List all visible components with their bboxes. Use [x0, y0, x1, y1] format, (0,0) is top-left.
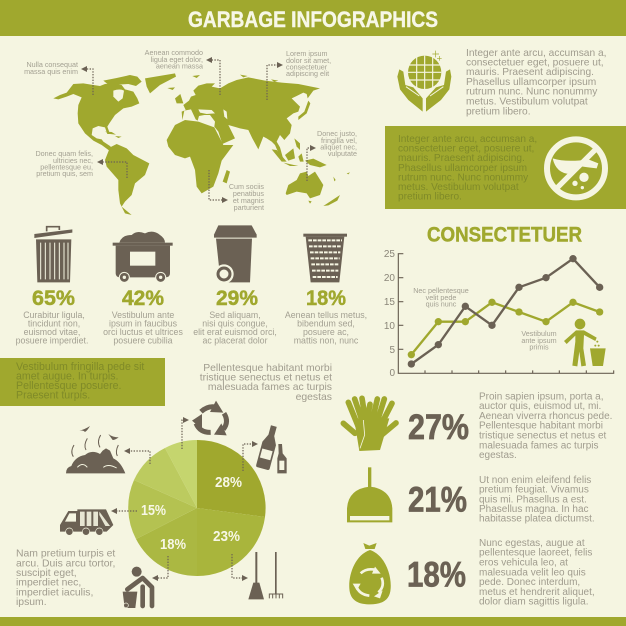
text: stat captions: ac placerat dolor — [202, 336, 268, 346]
line chart: 25 — [384, 249, 395, 260]
icon: dustpan — [347, 467, 392, 522]
text: gloves: auctor quis, euismod ut, mi. — [479, 401, 601, 412]
panel: green callout: Integer ante arcu, accumsan a, — [398, 134, 537, 145]
text: stat captions: ipsum in faucibus — [109, 318, 178, 328]
panel: left green box: amet augue. In turpis. — [16, 370, 118, 382]
stat: 29%: 29% — [216, 286, 258, 310]
text: stat captions: tincidunt non, — [28, 318, 80, 328]
map callouts: Donec quam felis, — [35, 149, 93, 158]
line chart: 0 — [389, 368, 395, 379]
icon: globe in hands — [397, 51, 451, 112]
text: gloves: Proin sapien ipsum, porta a, — [479, 391, 604, 402]
stat: 18%: 18% — [306, 286, 346, 310]
map callouts: Nulla consequat — [26, 60, 78, 69]
line chart: 15 — [384, 297, 395, 308]
map callouts: vulputate — [328, 149, 357, 158]
text: pie note: imperdiet nec, — [16, 578, 81, 589]
text block: intro: mauris. Praesent adipiscing. — [466, 67, 594, 78]
text: stat captions: mattis non, nunc — [294, 336, 359, 346]
line chart: primis — [529, 342, 549, 352]
text: pie caption: Pellentesque habitant morbi — [203, 363, 332, 374]
map callouts: pellentesque eu, — [40, 162, 93, 172]
icon: garbage bag — [349, 543, 391, 604]
text: bag: eros vehicula leo, at — [479, 558, 568, 569]
text block: intro: rutrum nunc. Nunc nonummy — [466, 87, 598, 98]
text: dustpan: pretium feugiat. Vivamus — [479, 485, 589, 496]
map callouts: fringilla vel, — [321, 136, 357, 145]
text: pie caption: malesuada fames ac turpis — [208, 382, 332, 393]
heading: consectetuer: CONSECTETUER — [427, 224, 582, 246]
text: dustpan: Phasellus magna. In hac — [479, 504, 589, 515]
text: stat captions: posuere imperdiet. — [16, 336, 88, 346]
panel: green callout — [385, 126, 626, 209]
map callouts: ultricies nec, — [53, 156, 93, 165]
map callouts: massa quis enim — [24, 67, 78, 76]
text: bag: pede. Donec interdum, — [479, 577, 580, 588]
stat: 42%: 42% — [122, 286, 164, 310]
line chart: ante ipsum — [521, 336, 557, 345]
line chart: velit pede — [426, 293, 456, 302]
text block: intro: pretium libero. — [466, 106, 531, 117]
icon: wheelie bin — [214, 225, 257, 284]
text: stat captions — [16, 310, 367, 346]
text: pie caption: egestas — [296, 392, 332, 403]
panel: left green box: Praesent turpis. — [16, 390, 90, 402]
map callouts: parturient — [234, 203, 264, 212]
map callouts: penatibus — [233, 189, 264, 198]
text: bag: dolor diam sagittis ligula. — [479, 597, 588, 608]
text: stat captions: posuere ac, — [303, 327, 349, 337]
map callouts: Aenean commodo — [145, 48, 203, 57]
text: stat captions: posuere cubilia — [113, 336, 173, 346]
pie chart: 15% — [141, 503, 166, 519]
text block: intro: Phasellus ullamcorper ipsum — [466, 77, 596, 88]
icon: recycle arrows — [192, 401, 227, 435]
panel: green callout: mauris. Praesent adipiscing. — [398, 153, 525, 164]
footer band — [0, 617, 626, 626]
stat: 27%: 27% — [408, 408, 469, 447]
map callouts: et magnis — [233, 196, 264, 205]
icon: trash can — [34, 227, 72, 282]
map callouts: aenean massa — [156, 62, 203, 70]
map callouts: Cum sociis — [229, 182, 264, 191]
line chart: 20 — [384, 273, 395, 284]
panel: left green box: Pellentesque posuere. — [16, 380, 121, 392]
line chart: 10 — [384, 321, 395, 332]
pie chart: 23% — [213, 529, 240, 545]
text: pie note: arcu. Duis arcu tortor, — [16, 558, 115, 569]
text: stat captions: bibendum sed, — [297, 318, 355, 328]
text: stat captions: Aenean tellus metus, — [285, 310, 367, 320]
icon: garbage pile — [66, 426, 125, 473]
text: bag: metus et hendrerit aliquet, — [479, 587, 595, 598]
text: gloves: malesuada fames ac turpis — [479, 440, 599, 451]
icon: no littering — [547, 139, 605, 197]
text: gloves: tristique senectus et netus et — [479, 430, 607, 441]
map callouts: dolor sit amet, — [286, 56, 331, 65]
title: GARBAGE INFOGRAPHICS — [188, 7, 438, 32]
line chart — [384, 249, 614, 379]
stat: 18%: 18% — [407, 556, 466, 595]
map callouts: Lorem ipsum — [286, 49, 328, 58]
icon: bottles — [256, 424, 287, 473]
pie chart — [128, 440, 266, 576]
text: stat captions: Sed aliquam, — [209, 310, 261, 320]
map callouts: Donec justo, — [317, 129, 357, 138]
text: dustpan: Ut non enim eleifend felis — [479, 475, 591, 486]
panel: green callout: pretium libero. — [398, 192, 462, 202]
icon: person at bin — [123, 567, 152, 608]
pie connectors — [111, 417, 258, 581]
text: stat captions: nisi quis congue, — [202, 318, 268, 328]
text: stat captions: Vestibulum ante — [112, 310, 174, 320]
line chart: 5 — [389, 345, 395, 356]
text: stat captions: Curabitur ligula, — [23, 310, 85, 320]
text: dustpan: habitasse platea dictumst. — [479, 514, 595, 525]
line chart: quis nunc — [426, 300, 457, 308]
panel: green callout: consectetuer eget, posuere ut, — [398, 144, 534, 154]
stat: 65%: 65% — [32, 286, 75, 310]
text: stat captions: euismod vitae, — [24, 327, 80, 337]
text: bag: pellentesque laoreet, felis — [479, 548, 592, 559]
icon: garbage truck — [60, 509, 113, 535]
line chart: Nec pellentesque — [413, 286, 469, 295]
text: bag: Nunc egestas, augue at — [479, 538, 585, 549]
text block: intro: Integer ante arcu, accumsan a, — [466, 48, 606, 59]
map callouts: aliquet nec, — [320, 142, 357, 152]
map callouts: ligula eget dolor, — [151, 55, 203, 64]
stat: 21%: 21% — [408, 481, 467, 520]
panel: left green box — [0, 358, 165, 406]
icon: broom and rake — [248, 552, 283, 599]
world map — [53, 73, 350, 215]
pie chart: 28% — [215, 475, 242, 491]
icon: person using bin — [564, 319, 606, 366]
text: pie note: suscipit eget, — [16, 568, 77, 579]
text: gloves: Pellentesque habitant morbi — [479, 421, 603, 432]
text: pie caption: tristique senectus et netus et — [200, 372, 332, 384]
text: pie note: Nam pretium turpis et — [16, 549, 115, 560]
text block: intro: metus. Vestibulum volutpat — [466, 96, 588, 108]
text: stat captions: elit erat euismod orci, — [193, 327, 277, 337]
text: dustpan: quis mi. Phasellus a est. — [479, 494, 587, 505]
map callouts: consectetuer — [286, 62, 328, 72]
icon: dumpster — [113, 232, 173, 282]
text: gloves: Aenean viverra rhoncus pede. — [479, 411, 612, 422]
panel: green callout: rutrum nunc. Nunc nonummy — [398, 172, 529, 184]
text: bag: malesuada velit leo quis — [479, 567, 586, 578]
icon: gloves — [343, 398, 396, 451]
map callouts: pretium quis, sem — [36, 169, 93, 178]
text: pie note: imperdiet iaculis, — [16, 587, 93, 598]
header band — [0, 0, 626, 36]
panel: left green box: Vestibulum fringilla pede sit — [16, 361, 144, 373]
text: stat captions: orci luctus et ultrices — [103, 327, 183, 337]
pie chart: 18% — [160, 537, 186, 553]
map callouts — [24, 48, 357, 212]
text block: intro: consectetuer eget, posuere ut, — [466, 58, 604, 68]
panel: green callout: Phasellus ullamcorper ipsum — [398, 163, 527, 174]
icon: waste basket — [303, 234, 347, 282]
map callouts: adipiscing elit — [286, 69, 329, 78]
text: gloves: egestas. — [479, 450, 517, 461]
text: pie note: ipsum. — [16, 597, 47, 608]
line chart: Vestibulum — [521, 329, 557, 338]
panel: green callout: metus. Vestibulum volutpat — [398, 182, 519, 193]
